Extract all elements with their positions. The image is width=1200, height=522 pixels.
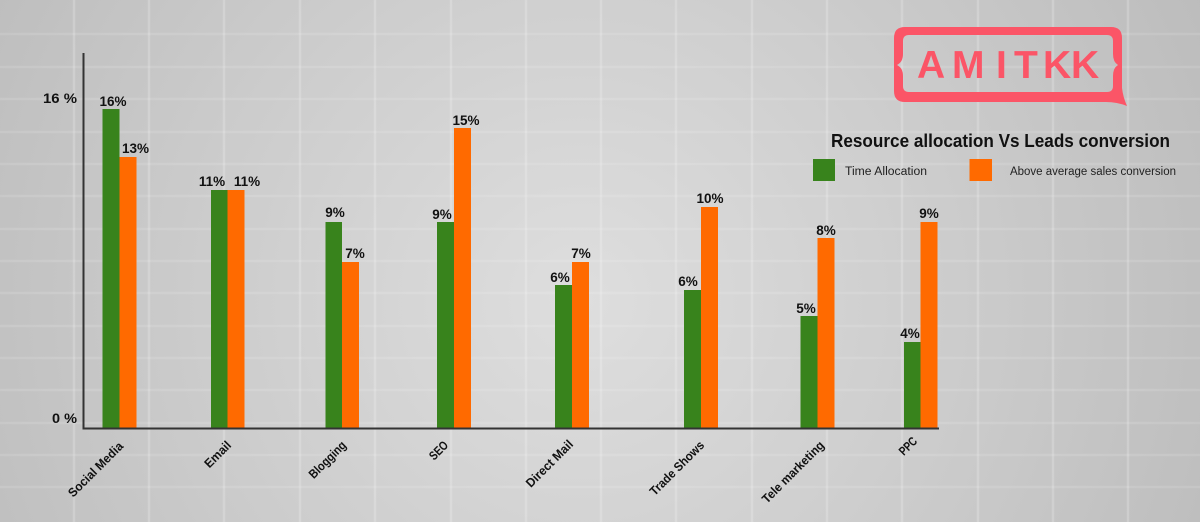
group: Email: 11%	[234, 174, 260, 189]
group: PPC	[896, 206, 939, 458]
group: SEO: 15%	[452, 113, 480, 128]
group: Email: Email	[202, 438, 234, 471]
group: Social Media: 13%	[122, 141, 149, 156]
logo: AMITKK speech bubble	[894, 27, 1127, 106]
group: Trade Shows: 10%	[696, 191, 724, 206]
group: PPC: 9%	[919, 206, 939, 221]
group: Direct Mail	[523, 246, 591, 490]
legend: above average sales conversion	[970, 159, 1176, 181]
y axis labels: 0 %	[52, 410, 78, 426]
group: PPC: 4%	[900, 326, 920, 341]
group: Tele marketing: 5%	[796, 301, 816, 316]
group: Blogging	[306, 205, 365, 481]
group: Trade Shows: Trade Shows	[647, 438, 707, 498]
group: Direct Mail: Direct Mail	[523, 437, 576, 490]
group: Email: 11%	[199, 174, 225, 189]
group: Trade Shows	[647, 191, 724, 498]
group: Blogging: 7%	[345, 246, 365, 261]
group: Email	[199, 174, 260, 471]
group: Social Media	[65, 94, 149, 500]
group: PPC: PPC	[896, 434, 920, 458]
group: Tele marketing: Tele marketing	[759, 438, 827, 506]
group: Direct Mail: 6%	[550, 270, 570, 285]
legend: time allocation: Time Allocation	[845, 166, 927, 178]
chart title: Resource allocation Vs Leads conversion	[831, 131, 1170, 151]
group: SEO: 9%	[432, 207, 452, 222]
group: SEO: SEO	[426, 438, 451, 463]
group: Blogging: 9%	[325, 205, 345, 220]
group: Social Media: 16%	[99, 94, 127, 109]
group: Blogging: Blogging	[306, 438, 349, 481]
group: Tele marketing: 8%	[816, 223, 836, 238]
axes	[84, 53, 939, 428]
legend: above average sales conversion: Above average sales conversion	[1010, 166, 1176, 178]
y axis labels: 16 %	[43, 90, 78, 106]
group: Trade Shows: 6%	[678, 274, 698, 289]
group: Tele marketing	[759, 223, 836, 506]
group: Social Media: Social Media	[65, 439, 127, 500]
bar chart	[43, 53, 939, 506]
y axis labels	[43, 90, 78, 426]
group: Direct Mail: 7%	[571, 246, 591, 261]
group: SEO	[426, 113, 480, 463]
legend: time allocation	[813, 159, 927, 181]
logo text: AMITKK	[917, 44, 1099, 87]
